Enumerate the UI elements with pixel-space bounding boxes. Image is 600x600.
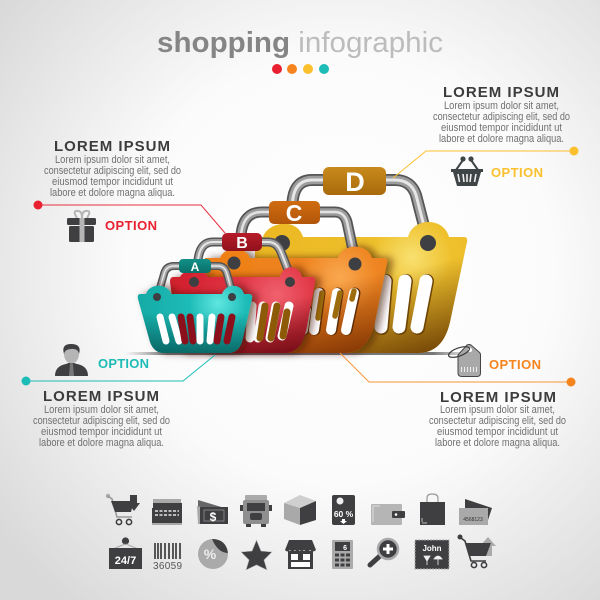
icon: store (285, 540, 316, 569)
text block: bottom right: eiusmod tempor incididunt ut (437, 426, 558, 438)
text block: top right: eiusmod tempor incididunt ut (441, 122, 562, 134)
text block: bottom right: Lorem ipsum dolor sit amet, (440, 404, 555, 416)
icon: percent sticker (198, 539, 228, 569)
option label: teal: OPTION (98, 356, 149, 371)
connector: orange (340, 353, 576, 386)
text block: top left: consectetur adipiscing elit, sed do (44, 165, 181, 177)
text block: top left: Lorem ipsum dolor sit amet, (55, 154, 170, 166)
text block: bottom right: LOREM IPSUM (440, 389, 556, 406)
icon: door hanger (332, 495, 355, 525)
icon: cart with up arrow (458, 534, 496, 568)
label A: A (191, 260, 200, 274)
text block: top right (433, 84, 570, 145)
icon: calculator (332, 540, 353, 569)
icon: door hanger: 60 % (334, 509, 354, 519)
icon: postage stamp: John (422, 544, 442, 553)
icon: cash register (152, 499, 182, 525)
icon: credit cards: 4568123 (463, 517, 483, 523)
icon: percent sticker: % (204, 546, 217, 562)
icon: truck (240, 495, 272, 527)
basket A teal (138, 266, 252, 353)
connector: teal (22, 355, 215, 386)
label B: B (236, 235, 248, 252)
chart: four nested shopping baskets (138, 167, 467, 353)
connector: red (34, 200, 225, 233)
icon: banknotes: $ (210, 510, 217, 524)
icon: magnifier (370, 539, 398, 565)
icon: gift (67, 211, 96, 242)
icon row 1: shopping and payment icons (106, 494, 492, 527)
basket B red (170, 242, 315, 353)
icon: shopping bag (420, 494, 445, 525)
text block: top right: LOREM IPSUM (443, 84, 559, 101)
icon: postage stamp (415, 540, 449, 569)
option label: yellow: OPTION (491, 165, 543, 180)
label D (323, 167, 386, 197)
icon: person (55, 344, 88, 376)
icon: 24/7 sign (109, 537, 142, 569)
text block: top left (44, 138, 181, 199)
label D: D (345, 167, 365, 197)
basket D yellow (255, 180, 467, 353)
option label: orange: OPTION (489, 357, 541, 372)
icon: price tag (447, 344, 480, 376)
text block: bottom right (429, 389, 566, 449)
text block: top left: labore et dolore magna aliqua. (50, 187, 175, 199)
text block: bottom left: eiusmod tempor incididunt ut (41, 426, 162, 438)
icon: box (284, 495, 316, 525)
text block: bottom left: LOREM IPSUM (43, 388, 159, 405)
icon: 24/7 sign: 24/7 (115, 555, 136, 567)
option label: red: OPTION (105, 218, 157, 233)
icon row 2: shopping and service icons (109, 534, 496, 572)
icon: barcode: 36059 (153, 561, 182, 572)
icon: star (241, 540, 272, 570)
icon: barcode (153, 543, 182, 572)
icon: basket (451, 156, 483, 186)
text block: bottom left: Lorem ipsum dolor sit amet, (44, 404, 159, 416)
label C: C (286, 200, 302, 226)
text block: bottom right: labore et dolore magna aliqua. (435, 437, 560, 449)
icon: cart with down arrow (106, 494, 140, 525)
text block: bottom left: consectetur adipiscing elit, sed do (33, 415, 170, 427)
text block: top right: labore et dolore magna aliqua. (439, 133, 564, 145)
icon: calculator: 6 (343, 545, 347, 552)
icon: banknotes (197, 500, 228, 524)
icon: credit cards (459, 499, 492, 525)
connector: yellow (393, 146, 578, 178)
label B (222, 233, 262, 252)
text block: bottom right: consectetur adipiscing elit, sed do (429, 415, 566, 427)
title: shopping infographic (157, 27, 443, 59)
text block: top right: consectetur adipiscing elit, sed do (433, 111, 570, 123)
title dots (272, 64, 329, 74)
text block: bottom left: labore et dolore magna aliqua. (39, 437, 164, 449)
icon: wallet (371, 504, 405, 525)
floor shadow (125, 352, 475, 355)
text block: top right: Lorem ipsum dolor sit amet, (444, 100, 559, 112)
text block: bottom left (33, 388, 170, 449)
label A (179, 259, 211, 274)
label C (269, 200, 320, 226)
text block: top left: eiusmod tempor incididunt ut (52, 176, 173, 188)
basket C orange (205, 212, 387, 353)
text block: top left: LOREM IPSUM (54, 138, 170, 155)
